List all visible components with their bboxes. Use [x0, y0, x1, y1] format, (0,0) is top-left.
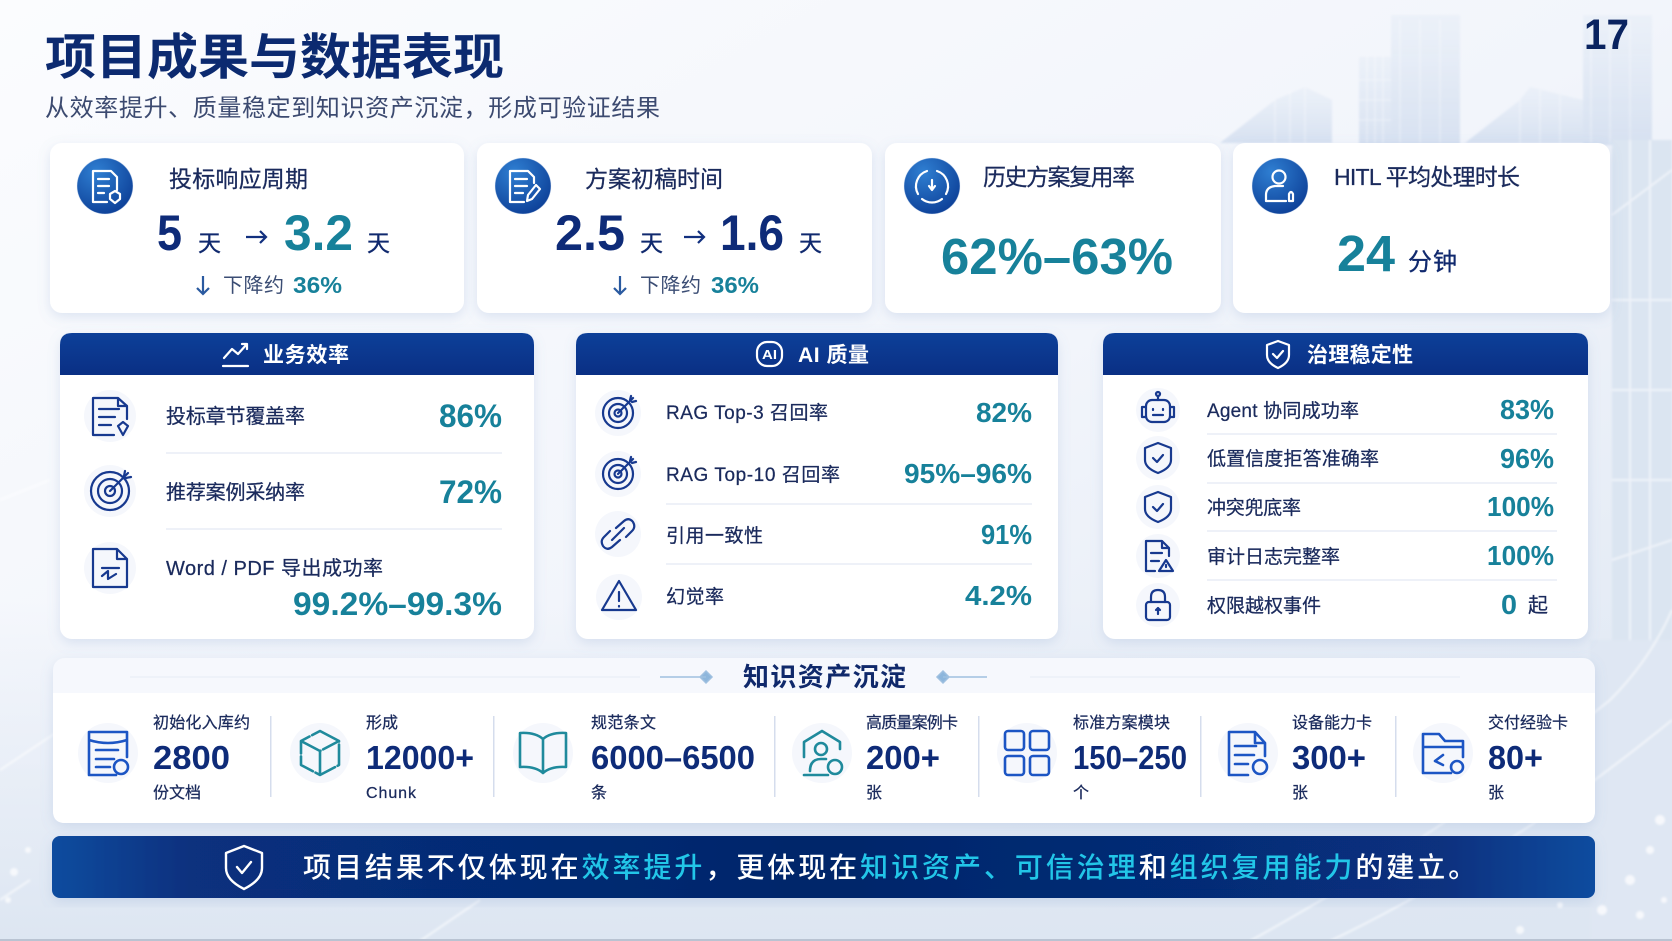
- panel: AI 质量: RAG Top-10 召回率: [666, 464, 840, 486]
- item: 150-250: 标准方案模块: [1073, 714, 1170, 732]
- item: 2800: 初始化入库约: [153, 714, 250, 732]
- panel: AI 质量: 引用一致性: [666, 525, 763, 547]
- panel: 知识资产沉淀: [53, 658, 1595, 823]
- panel: 治理稳定性: 100%: [1487, 540, 1554, 571]
- KPI card: HITL 平均处理时长: [1233, 143, 1610, 313]
- icon: document: [84, 390, 136, 442]
- panel: 业务效率: 推荐案例采纳率: [166, 481, 305, 504]
- panel header: [60, 333, 534, 375]
- panel: 治理稳定性: 起: [1528, 594, 1548, 617]
- page number: 17: [1584, 11, 1629, 59]
- KPI card: 历史方案复用率: 62%–63%: [941, 228, 1173, 285]
- arrow: left ornament: [660, 671, 712, 683]
- item: 12000+: Chunk: [366, 785, 417, 802]
- panel: 治理稳定性: 100%: [1487, 491, 1554, 522]
- icon: modules grid: [997, 723, 1057, 783]
- icon: database document: [78, 723, 138, 783]
- icon: target: [595, 390, 641, 436]
- item: 200+: 张: [866, 784, 882, 802]
- KPI card: 投标响应周期: 5: [157, 205, 182, 261]
- panel: AI 质量: RAG Top-3 召回率: [666, 402, 828, 424]
- icon: reuse cycle: [904, 158, 960, 214]
- item: 12000+: 12000+: [366, 739, 474, 776]
- icon: warning: [596, 574, 642, 620]
- panel: 业务效率: 86%: [439, 398, 502, 434]
- panel: AI 质量: AI 质量: [798, 344, 869, 367]
- item: 200+: 高质量案例卡: [866, 714, 958, 732]
- KPI card: 方案初稿时间: 下降约: [640, 274, 701, 297]
- title: 项目成果与数据表现: [45, 31, 504, 85]
- panel: 治理稳定性: 0: [1501, 589, 1517, 620]
- KPI card: HITL 平均处理时长: HITL 平均处理时长: [1334, 164, 1520, 190]
- item: 6000-6500: 6000–6500: [591, 739, 755, 776]
- KPI card: 投标响应周期: 36%: [293, 272, 342, 298]
- icon: shield check: [226, 846, 262, 889]
- KPI card: HITL 平均处理时长: 24: [1337, 225, 1396, 282]
- subtitle: 从效率提升、质量稳定到知识资产沉淀，形成可验证结果: [45, 95, 660, 122]
- item: 80+: 交付经验卡: [1488, 714, 1568, 732]
- panel: 业务效率: 72%: [439, 474, 502, 510]
- arrow: right ornament: [937, 671, 987, 683]
- panel: AI 质量: 91%: [981, 519, 1032, 550]
- arrow: down: [197, 276, 209, 294]
- icon: book: [513, 723, 573, 783]
- icon: tender document: [77, 158, 133, 214]
- panel: 业务效率: 99.2%–99.3%: [293, 586, 502, 622]
- KPI card: 方案初稿时间: 天: [799, 230, 822, 256]
- icon: export file: [84, 542, 136, 594]
- item: 150-250: 150–250: [1073, 739, 1187, 776]
- banner: conclusion: 项目结果不仅体现在效率提升，更体现在知识资产、可信治理和组织复用能力的建立。: [303, 852, 1479, 883]
- KPI card: 方案初稿时间: 方案初稿时间: [585, 166, 723, 192]
- icon: target: [84, 465, 136, 517]
- heading: 知识资产沉淀: [743, 662, 906, 692]
- item: 80+: 80+: [1488, 739, 1543, 776]
- KPI card: HITL 平均处理时长: 分钟: [1408, 249, 1457, 276]
- panel: 业务效率: 投标章节覆盖率: [166, 405, 305, 428]
- KPI card: 投标响应周期: 下降约: [223, 274, 284, 297]
- panel header: [576, 333, 1058, 375]
- panel: 治理稳定性: 83%: [1500, 394, 1554, 425]
- icon: AI badge: [757, 342, 782, 366]
- item: 2800: 份文档: [153, 784, 201, 802]
- panel: AI 质量: 82%: [976, 397, 1032, 428]
- icon: robot: [1136, 388, 1180, 432]
- item: 300+: 张: [1292, 784, 1308, 802]
- item: 12000+: [290, 714, 474, 802]
- icon: capability document: [1218, 723, 1278, 783]
- arrow: [246, 231, 266, 243]
- KPI card: 历史方案复用率: [885, 143, 1221, 313]
- panel: 治理稳定性: 96%: [1500, 443, 1554, 474]
- KPI card: 方案初稿时间: [477, 143, 872, 313]
- item: 6000-6500: 条: [591, 784, 607, 802]
- panel: 业务效率: 业务效率: [263, 344, 349, 367]
- item: 300+: 设备能力卡: [1292, 714, 1372, 732]
- panel: AI 质量: 95%–96%: [904, 458, 1032, 489]
- panel: 治理稳定性: 权限越权事件: [1207, 595, 1321, 617]
- arrow: [684, 231, 704, 243]
- KPI card: 投标响应周期: 投标响应周期: [169, 166, 308, 192]
- arrow: down: [614, 276, 626, 294]
- icon: lock: [1136, 583, 1180, 627]
- icon: shield: [1267, 341, 1289, 368]
- panel: 治理稳定性: Agent 协同成功率: [1207, 400, 1359, 422]
- panel: 业务效率: [60, 333, 534, 639]
- KPI card: 方案初稿时间: 36%: [711, 272, 759, 298]
- panel: 治理稳定性: 低置信度拒答准确率: [1207, 448, 1379, 470]
- panel: 治理稳定性: [1103, 333, 1588, 639]
- panel: 治理稳定性: 冲突兜底率: [1207, 497, 1301, 519]
- icon: link: [595, 511, 641, 557]
- KPI card: 投标响应周期: 天: [198, 230, 221, 256]
- panel: AI 质量: [576, 333, 1058, 639]
- panel: 治理稳定性: 审计日志完整率: [1207, 546, 1340, 568]
- item: 80+: 张: [1488, 784, 1504, 802]
- item: 2800: [78, 714, 250, 802]
- KPI card: 投标响应周期: 3.2: [284, 205, 353, 261]
- item: 300+: [1218, 714, 1372, 802]
- KPI card: 方案初稿时间: 天: [640, 230, 663, 256]
- KPI card: 历史方案复用率: 历史方案复用率: [983, 164, 1135, 190]
- item: 150-250: 个: [1073, 784, 1089, 802]
- icon: AI badge: AI: [762, 347, 777, 362]
- item: 200+: [792, 714, 958, 802]
- item: 6000-6500: [513, 714, 755, 802]
- item: 2800: 2800: [153, 739, 230, 776]
- item: 150-250: [997, 714, 1187, 802]
- item: 12000+: 形成: [366, 714, 398, 732]
- panel: AI 质量: 幻觉率: [666, 586, 724, 608]
- icon: cube: [290, 723, 350, 783]
- icon: trend line: [223, 344, 248, 366]
- panel: AI 质量: 4.2%: [965, 580, 1032, 611]
- icon: person: [1252, 158, 1308, 214]
- KPI card: 方案初稿时间: 2.5: [555, 205, 625, 261]
- item: 6000-6500: 规范条文: [591, 714, 656, 732]
- icon: experience folder: [1413, 723, 1473, 783]
- KPI card: 投标响应周期: [50, 143, 464, 313]
- icon: draft document: [495, 158, 551, 214]
- icon: shield: [1136, 436, 1180, 480]
- icon: target: [595, 451, 641, 497]
- icon: shield: [1136, 485, 1180, 529]
- item: 200+: 200+: [866, 739, 940, 776]
- banner: conclusion: [52, 836, 1595, 898]
- icon: audit log: [1136, 534, 1180, 578]
- panel: 治理稳定性: 治理稳定性: [1307, 343, 1413, 367]
- KPI card: 投标响应周期: 天: [367, 230, 390, 256]
- panel: 业务效率: Word / PDF 导出成功率: [166, 557, 383, 580]
- icon: case card: [792, 723, 852, 783]
- item: 80+: [1413, 714, 1568, 802]
- item: 300+: 300+: [1292, 739, 1366, 776]
- KPI card: 方案初稿时间: 1.6: [720, 205, 784, 261]
- panel header: [1103, 333, 1588, 375]
